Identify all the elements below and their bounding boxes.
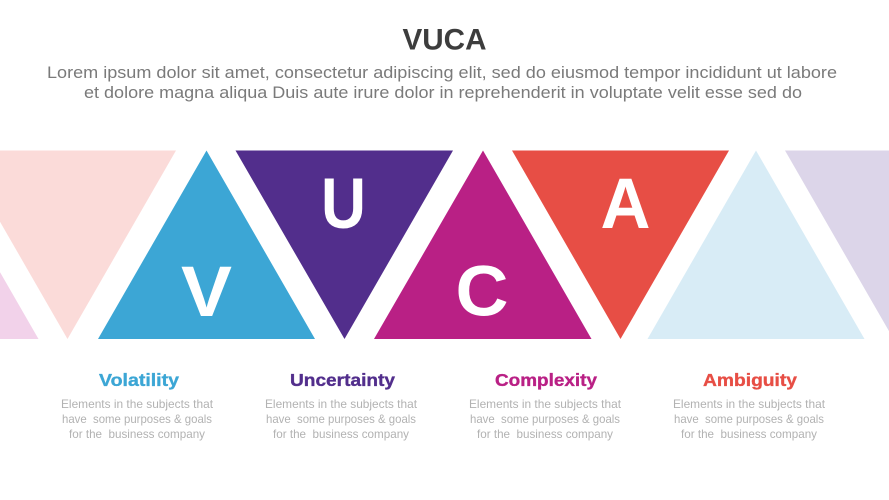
column: Volatility <box>61 370 214 441</box>
column: Ambiguity: for the business company <box>681 427 817 441</box>
column: Ambiguity: Ambiguity <box>703 370 797 390</box>
triangle: C: C <box>456 252 508 332</box>
triangle: C <box>374 150 592 339</box>
column: Ambiguity <box>673 370 826 441</box>
decorative triangle: light blue <box>648 150 864 339</box>
column: Uncertainty: for the business company <box>273 427 409 441</box>
column: Ambiguity: Elements in the subjects that <box>673 397 826 411</box>
column: Uncertainty: Uncertainty <box>290 370 395 390</box>
column: Volatility: for the business company <box>69 427 205 441</box>
triangle: A: A <box>600 165 650 244</box>
column: Complexity <box>469 370 622 441</box>
subtitle <box>47 63 837 102</box>
subtitle: et dolore magna aliqua Duis aute irure dolor in reprehenderit in voluptate velit esse sed do <box>84 83 802 102</box>
triangle: U: U <box>321 165 366 244</box>
column: Ambiguity: have some purposes & goals <box>674 412 824 426</box>
column: Complexity: have some purposes & goals <box>470 412 620 426</box>
decorative triangle: lavender <box>785 150 889 339</box>
column: Volatility: have some purposes & goals <box>62 412 212 426</box>
subtitle: Lorem ipsum dolor sit amet, consectetur adipiscing elit, sed do eiusmod tempor incididunt ut labore <box>47 63 837 82</box>
triangle: V: V <box>181 253 232 332</box>
column: Uncertainty: have some purposes & goals <box>266 412 416 426</box>
column: Uncertainty <box>265 370 418 441</box>
triangle: A <box>512 150 729 339</box>
column: Volatility: Elements in the subjects that <box>61 397 214 411</box>
triangle: U <box>236 150 453 339</box>
triangle: V <box>98 150 315 339</box>
column: Complexity: for the business company <box>477 427 613 441</box>
column: Volatility: Volatility <box>99 370 179 390</box>
title: VUCA <box>402 24 486 56</box>
column: Uncertainty: Elements in the subjects that <box>265 397 418 411</box>
column: Complexity: Elements in the subjects that <box>469 397 622 411</box>
decorative triangle: far left pink <box>0 150 38 339</box>
column: Complexity: Complexity <box>495 370 597 390</box>
decorative triangle: light red <box>0 150 176 339</box>
